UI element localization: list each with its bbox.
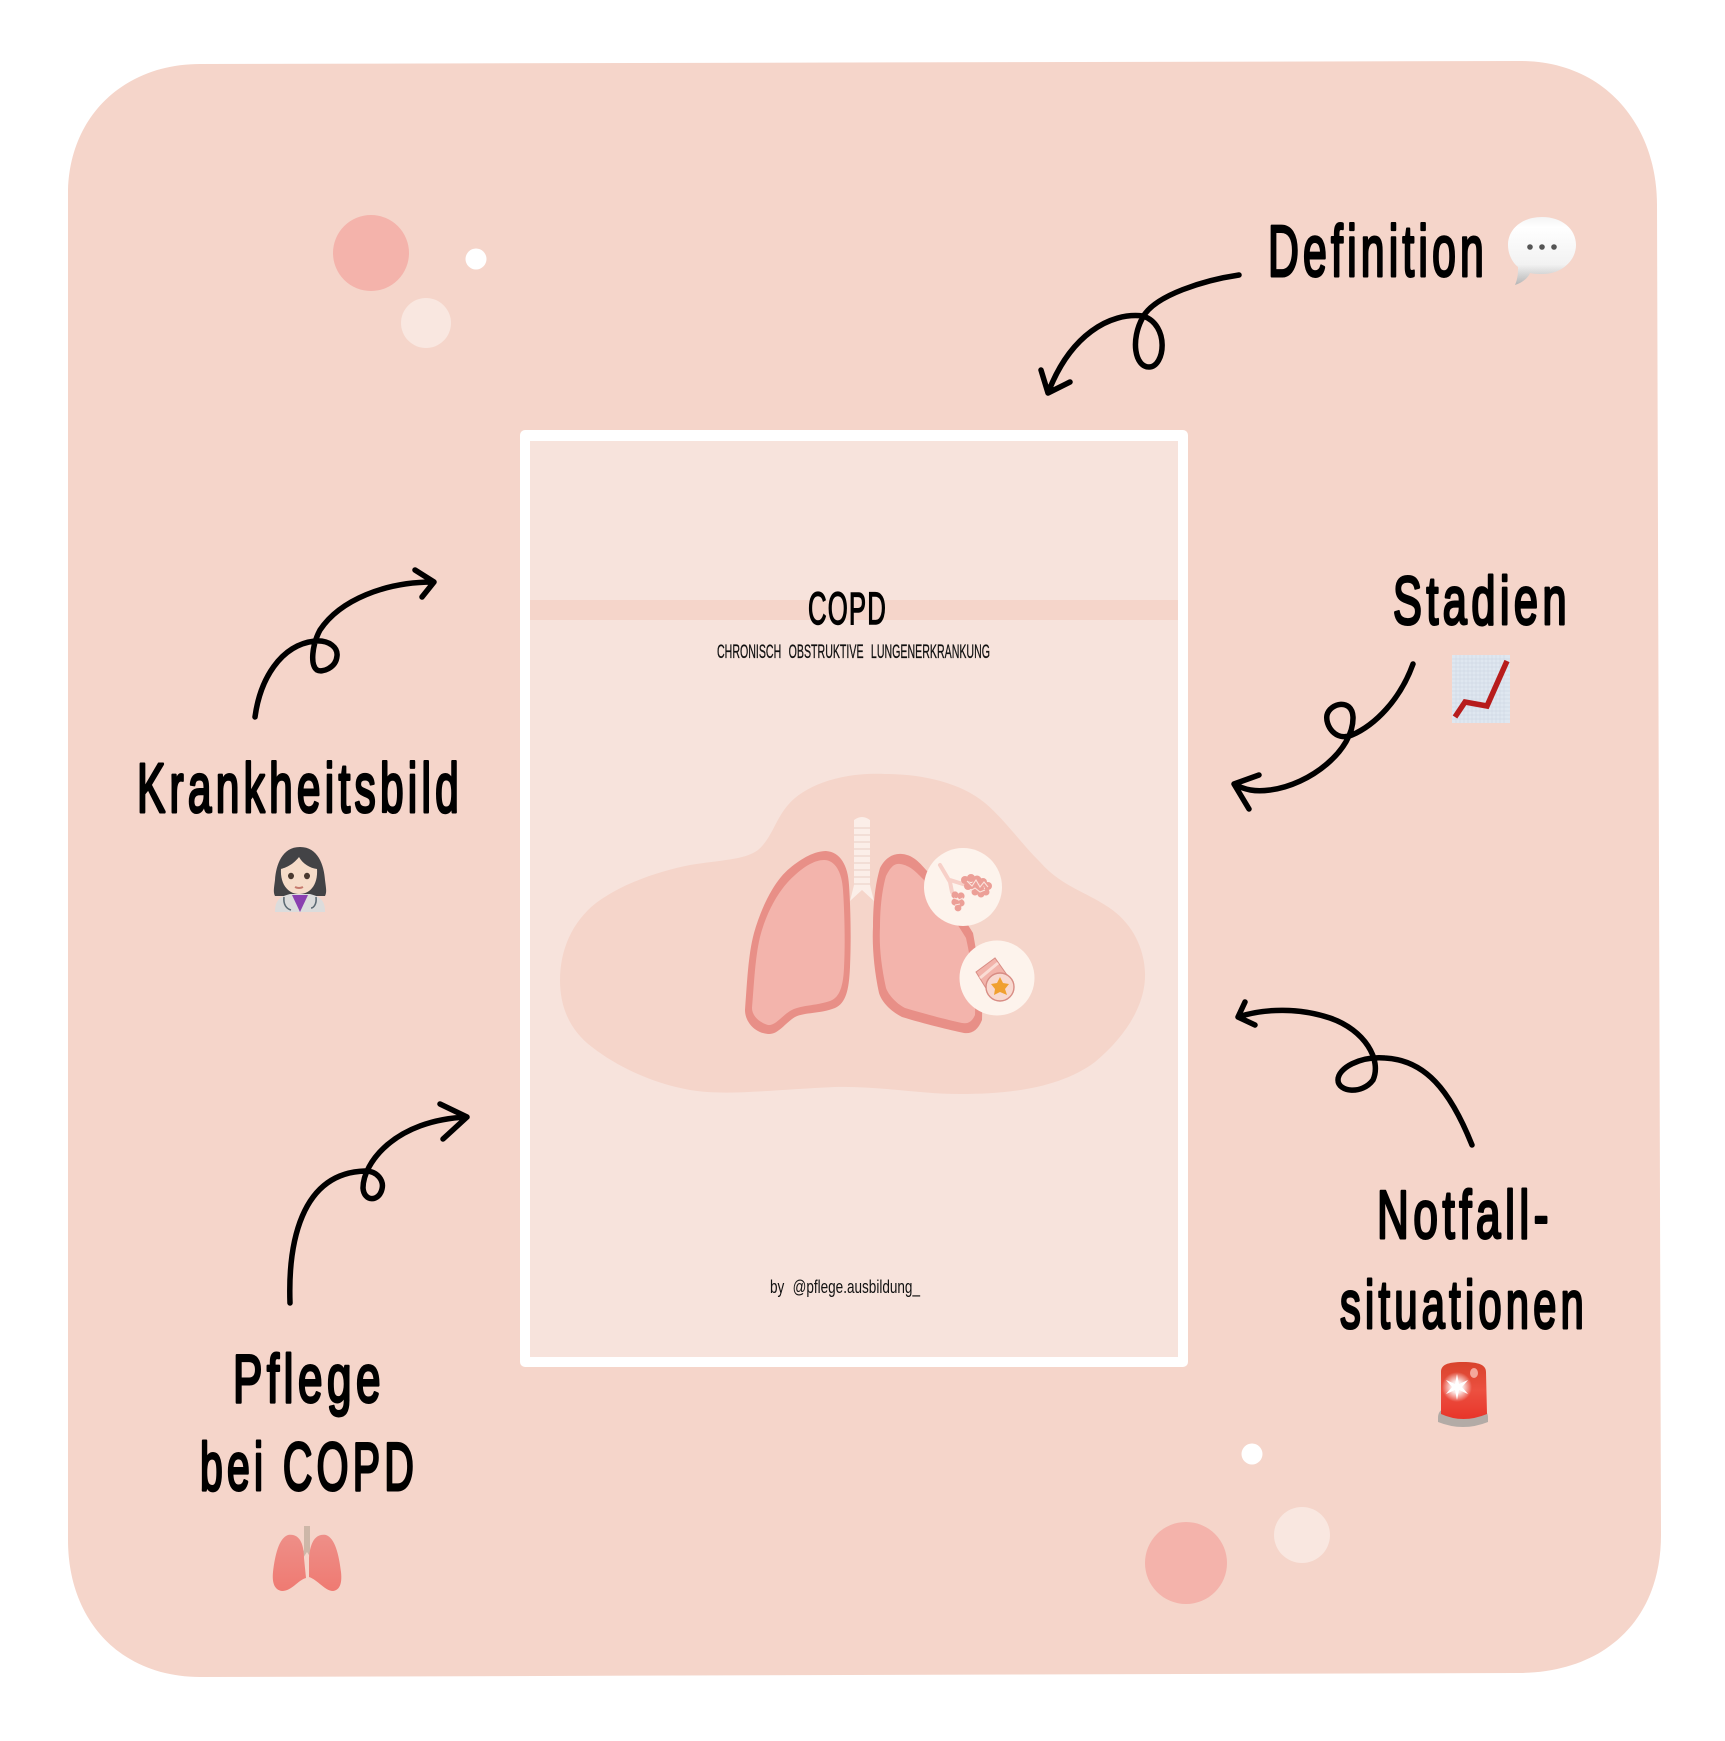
label: bei COPD: bei COPD	[200, 1429, 418, 1505]
label: Definition: Definition	[1268, 212, 1488, 292]
arrow: Pflege to cover	[290, 1104, 467, 1303]
cover title: COPD	[808, 583, 887, 634]
icon: siren	[1438, 1362, 1488, 1427]
decorative circles bottom right	[1145, 1444, 1330, 1604]
label: Pflege: Pflege	[233, 1341, 385, 1417]
background blob	[560, 774, 1145, 1094]
label: Notfall-: Notfall-	[1377, 1177, 1553, 1253]
inset: alveoli	[924, 848, 1002, 926]
byline: by @pflege.ausbildung_	[770, 1277, 921, 1298]
arrow: Stadien to cover	[1234, 664, 1413, 809]
trachea	[850, 817, 874, 901]
inset: airway	[960, 940, 1034, 1016]
cover frame	[520, 430, 1188, 1367]
icon: chart	[1452, 655, 1510, 723]
icon: speech bubble	[1508, 217, 1576, 285]
arrow: Krankheitsbild to cover	[255, 570, 434, 717]
panel: cover page	[520, 430, 1188, 1367]
label: Stadien: Stadien	[1393, 563, 1571, 639]
icon: doctor	[274, 847, 326, 912]
label: Krankheitsbild: Krankheitsbild	[137, 749, 463, 827]
cover background	[530, 441, 1178, 1357]
icon: lungs	[273, 1526, 341, 1591]
arrow: Definition to cover	[1041, 275, 1239, 393]
arrow: Notfall to cover	[1238, 1002, 1472, 1145]
right lung	[873, 854, 982, 1033]
cover subtitle: CHRONISCH OBSTRUKTIVE LUNGENERKRANKUNG	[717, 642, 990, 663]
left lung	[745, 851, 851, 1034]
title band	[530, 600, 1178, 620]
decorative circles top left	[333, 215, 486, 348]
